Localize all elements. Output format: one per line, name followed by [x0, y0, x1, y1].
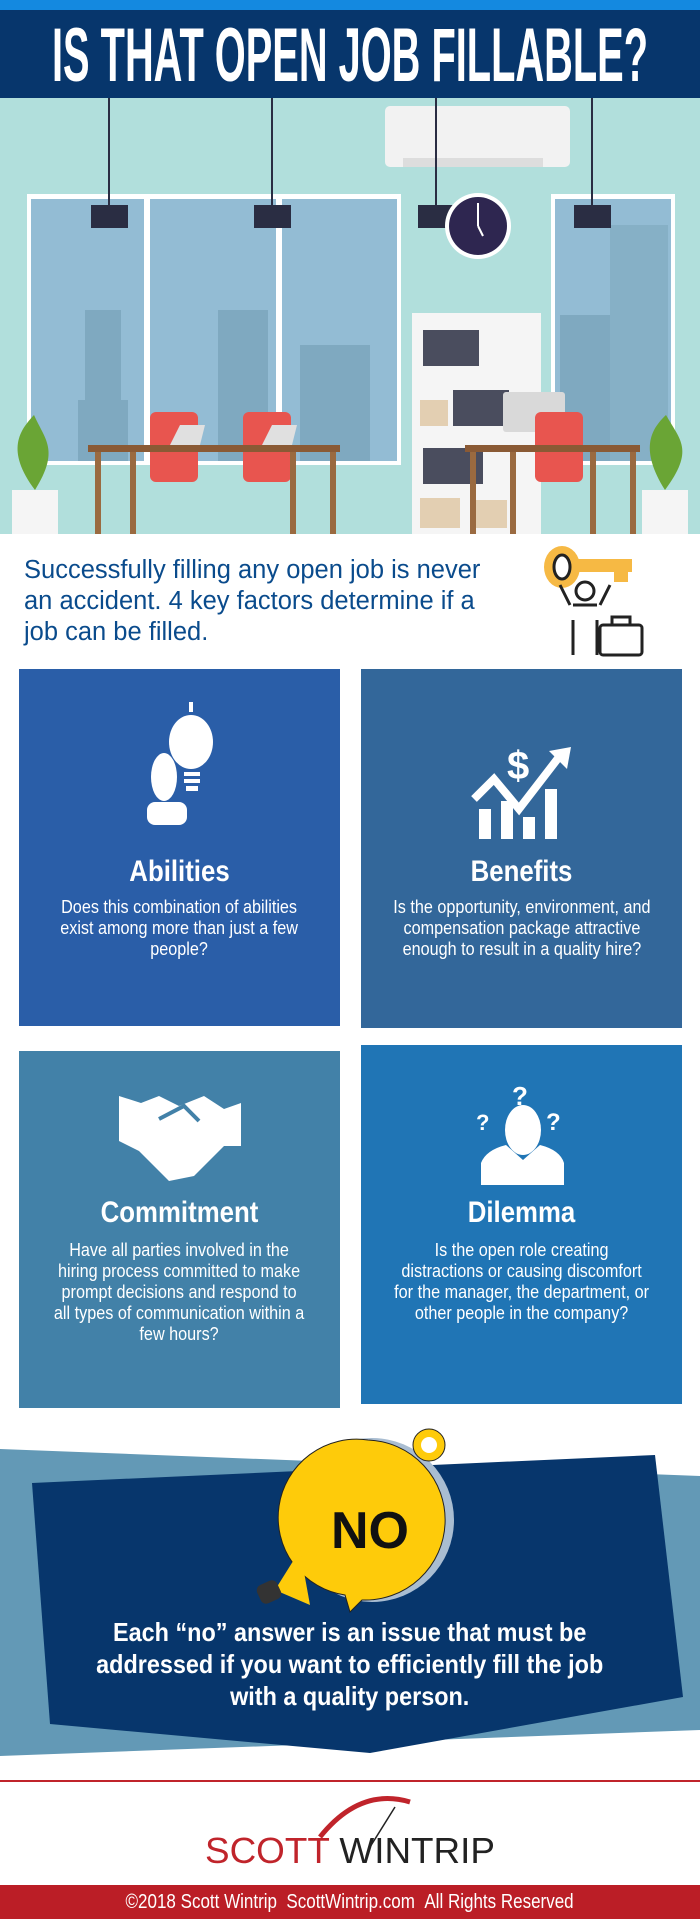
- intro text: an accident. 4 key factors determine if a: [24, 587, 475, 615]
- logo: Scott Wintrip: SCOTT WINTRIP: [205, 1830, 495, 1871]
- icon: handshake: [119, 1096, 241, 1181]
- panel: abilities: [19, 669, 340, 1026]
- icon: NO speech bubble with megaphone: [255, 1429, 454, 1612]
- intro text: [23, 556, 480, 646]
- callout text: Each “no” answer is an issue that must be: [113, 1617, 587, 1647]
- callout banner: [0, 1428, 700, 1756]
- icon: confused person: [476, 1081, 564, 1185]
- icon: NO speech bubble with megaphone: NO: [331, 1502, 409, 1560]
- body text: prompt decisions and respond to: [62, 1282, 297, 1302]
- body text: [394, 1240, 649, 1323]
- body text: Is the open role creating: [435, 1240, 608, 1260]
- icon: woman with lightbulb: [147, 702, 213, 825]
- illustration: office scene: [0, 98, 700, 534]
- header: title band: [0, 0, 700, 98]
- body text: [393, 897, 650, 959]
- panel: commitment: [19, 1051, 340, 1408]
- body text: other people in the company?: [415, 1303, 628, 1323]
- icon: key and person with briefcase: [544, 546, 644, 656]
- body text: people?: [151, 939, 208, 959]
- panel: benefits: [361, 669, 682, 1028]
- body text: few hours?: [140, 1324, 219, 1344]
- body text: [54, 1240, 305, 1344]
- icon: dollar chart: [471, 744, 571, 839]
- callout text: with a quality person.: [230, 1681, 470, 1711]
- body text: exist among more than just a few: [61, 918, 298, 938]
- body text: Have all parties involved in the: [70, 1240, 289, 1260]
- heading: Commitment: [101, 1196, 258, 1229]
- heading: Dilemma: [468, 1196, 575, 1229]
- callout text: addressed if you want to efficiently fill the job: [96, 1649, 604, 1679]
- heading: Abilities: [129, 855, 230, 888]
- callout text: [96, 1617, 604, 1711]
- icon: confused person: ?: [512, 1081, 528, 1111]
- body text: distractions or causing discomfort: [401, 1261, 642, 1281]
- panel: dilemma: [361, 1045, 682, 1404]
- body text: Is the opportunity, environment, and: [393, 897, 650, 917]
- body text: Does this combination of abilities: [62, 897, 297, 917]
- body text: for the manager, the department, or: [394, 1282, 649, 1302]
- icon: dollar chart: $: [507, 744, 529, 788]
- body text: enough to result in a quality hire?: [402, 939, 641, 959]
- icon: confused person: ?: [546, 1109, 561, 1136]
- body text: [60, 897, 298, 959]
- footer: ©2018 Scott Wintrip ScottWintrip.com All Rights Reserved: [126, 1891, 574, 1913]
- intro text: job can be filled.: [24, 618, 208, 646]
- intro text: Successfully filling any open job is never: [24, 556, 480, 584]
- body text: compensation package attractive: [403, 918, 640, 938]
- footer: [0, 1885, 700, 1919]
- icon: confused person: ?: [476, 1110, 489, 1135]
- logo: Scott Wintrip: [205, 1796, 495, 1871]
- body text: hiring process committed to make: [58, 1261, 301, 1281]
- body text: all types of communication within a: [54, 1303, 305, 1323]
- heading: Benefits: [471, 855, 572, 888]
